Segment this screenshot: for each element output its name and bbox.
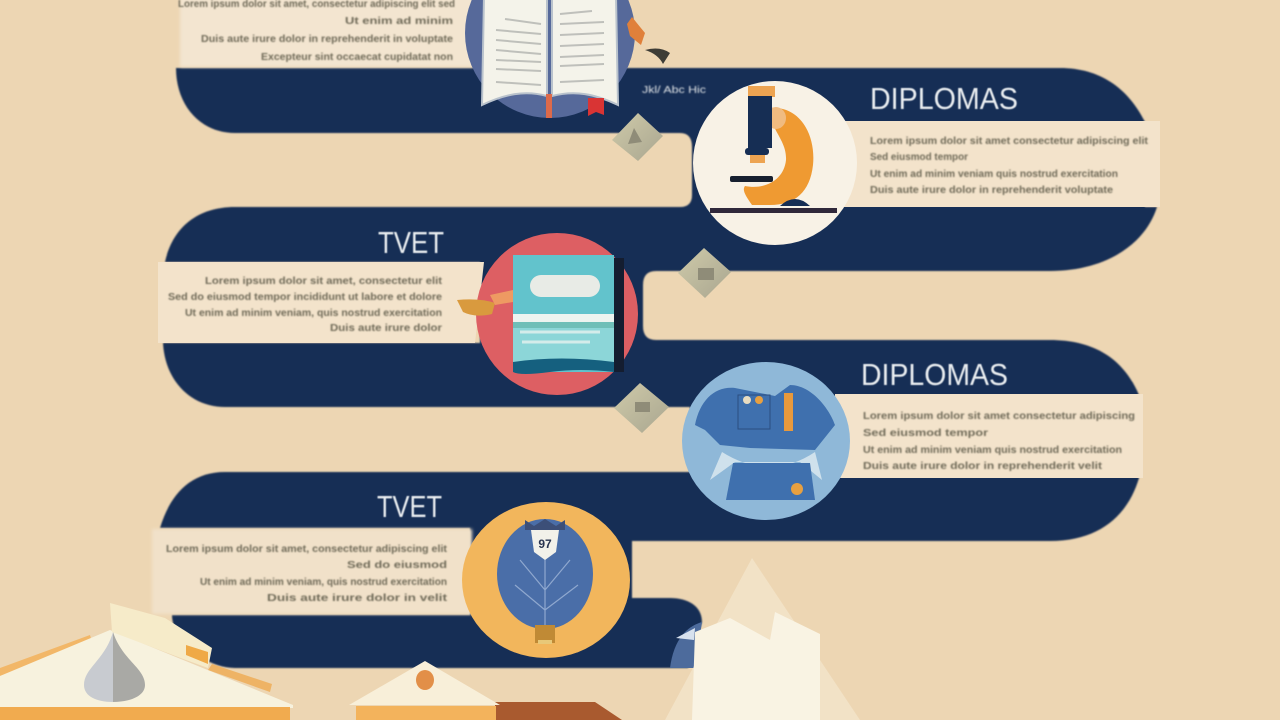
panel: TVET lower text: Ut enim ad minim veniam, quis nostrud exercitation (200, 576, 447, 588)
panel: diplomas lower text (835, 394, 1143, 478)
panel: TVET upper text: Sed do eiusmod tempor incididunt ut labore et dolore (168, 291, 442, 303)
panel: TVET upper text (158, 262, 484, 343)
connector diamond 2 (678, 248, 731, 298)
serpentine navy ribbon (160, 68, 1157, 668)
panel: TVET lower text: Duis aute irure dolor in velit (267, 592, 448, 604)
panel: TVET lower text: Lorem ipsum dolor sit amet, consectetur adipiscing elit (166, 543, 448, 555)
icon: textbook (457, 233, 638, 395)
building: centre school (349, 661, 622, 720)
heading: TVET upper: TVET (378, 225, 444, 260)
icon: globe light bulb (462, 502, 630, 658)
panel: TVET upper text: Ut enim ad minim veniam, quis nostrud exercitation (185, 307, 442, 319)
heading: TVET lower: TVET (377, 489, 442, 524)
heading: diplomas upper: DIPLOMAS (870, 81, 1018, 116)
icon: workwear uniform (682, 362, 850, 520)
connector diamond 3 (614, 383, 669, 433)
panel: diplomas upper text: Sed eiusmod tempor (870, 151, 968, 163)
panel: diplomas lower text: Duis aute irure dolor in reprehenderit velit (863, 460, 1103, 472)
panel: diplomas lower text: Lorem ipsum dolor sit amet consectetur adipiscing (863, 410, 1135, 422)
panel: diplomas upper text (835, 121, 1160, 207)
panel: TVET lower text: Sed do eiusmod (347, 559, 447, 571)
icon: open book (465, 0, 670, 118)
heading: diplomas lower: DIPLOMAS (861, 357, 1008, 392)
small ribbon label: Jkl/ Abc Hic (642, 85, 706, 96)
panel: diplomas upper text: Ut enim ad minim veniam quis nostrud exercitation (870, 168, 1118, 180)
panel: diplomas upper text: Duis aute irure dolor in reprehenderit voluptate (870, 184, 1113, 196)
building: left hall (0, 603, 293, 720)
panel: diplomas upper text: Lorem ipsum dolor sit amet consectetur adipiscing elit (870, 135, 1149, 147)
panel: top text block: Duis aute irure dolor in reprehenderit in voluptate (201, 33, 453, 45)
panel: top text block: Excepteur sint occaecat cupidatat non (261, 51, 453, 63)
connector diamond 1 (612, 113, 663, 161)
building: right tower (665, 558, 860, 720)
panel: TVET upper text: Duis aute irure dolor (330, 322, 442, 334)
panel: diplomas lower text: Ut enim ad minim veniam quis nostrud exercitation (863, 444, 1122, 456)
panel: top text block: Ut enim ad minim (345, 15, 453, 27)
panel: TVET upper text: Lorem ipsum dolor sit amet, consectetur elit (205, 275, 443, 287)
icon: globe light bulb: 97 (538, 537, 552, 551)
panel: diplomas lower text: Sed eiusmod tempor (863, 427, 988, 439)
icon: microscope (693, 81, 857, 245)
panel: TVET lower text (152, 529, 472, 614)
panel: top text block (178, 0, 473, 67)
